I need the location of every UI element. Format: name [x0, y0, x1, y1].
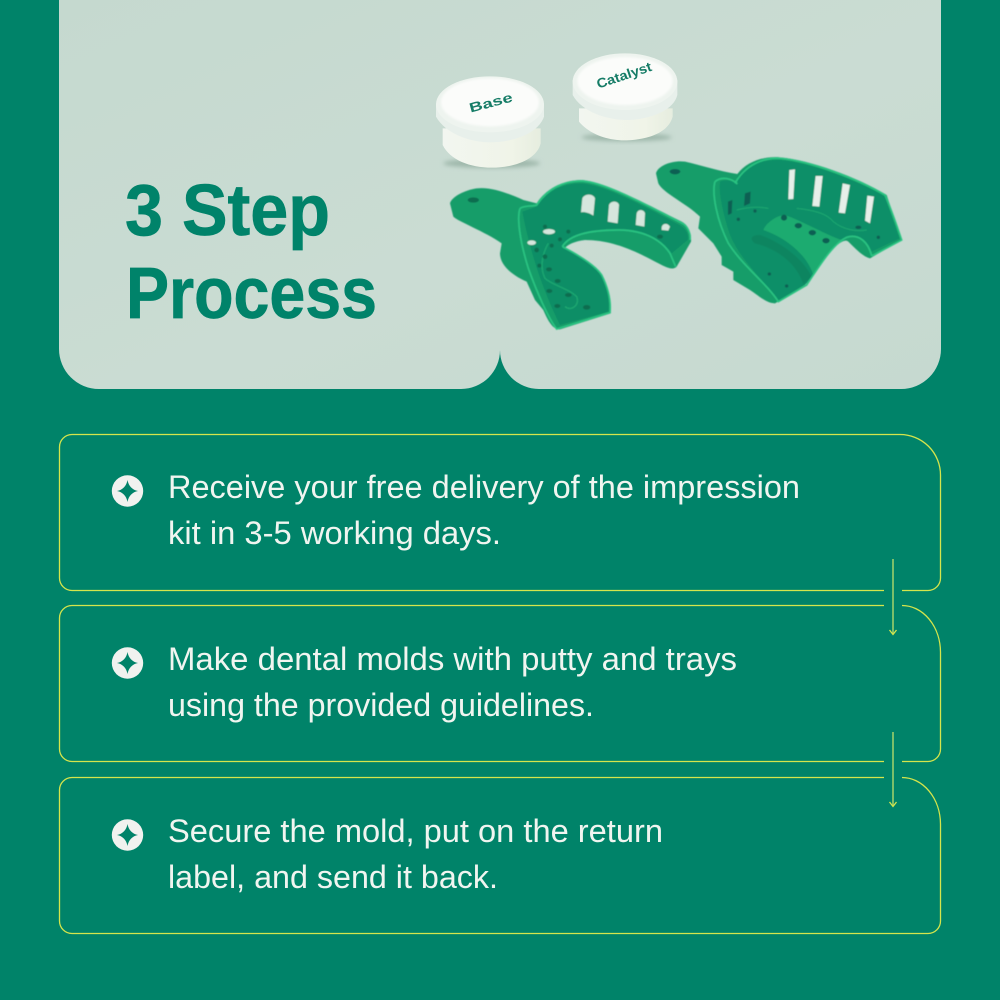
jar: base [436, 76, 544, 168]
title [125, 171, 377, 334]
photo: tray left [450, 180, 691, 329]
photo panel [59, 0, 941, 389]
title: 3 Step [125, 171, 330, 251]
jar: catalyst [573, 53, 677, 141]
tray slots [788, 169, 874, 223]
icon: sparkle badge [112, 475, 143, 507]
step 3 text: Secure the mold, put on the return [168, 813, 663, 849]
tray slots [527, 195, 670, 245]
jar: base: Base [468, 90, 514, 116]
icon: sparkle badge [112, 647, 143, 679]
photo: jars [436, 53, 677, 168]
icon: sparkle badge [112, 819, 143, 851]
jar: catalyst: Catalyst [595, 59, 654, 92]
step 3 text: label, and send it back. [168, 859, 498, 895]
arrow: step 2 to step 3 [890, 732, 896, 806]
step 1 card [60, 434, 940, 590]
step 1 text: kit in 3-5 working days. [168, 515, 501, 551]
step 3 card [60, 778, 940, 934]
photo: tray right [656, 157, 902, 303]
step 2 text: Make dental molds with putty and trays [168, 641, 737, 677]
step 2 card [60, 605, 940, 762]
arrow: step 1 to step 2 [890, 559, 896, 634]
step 1 text: Receive your free delivery of the impression [168, 469, 800, 505]
step 2 text: using the provided guidelines. [168, 687, 594, 723]
title: Process [126, 254, 377, 334]
